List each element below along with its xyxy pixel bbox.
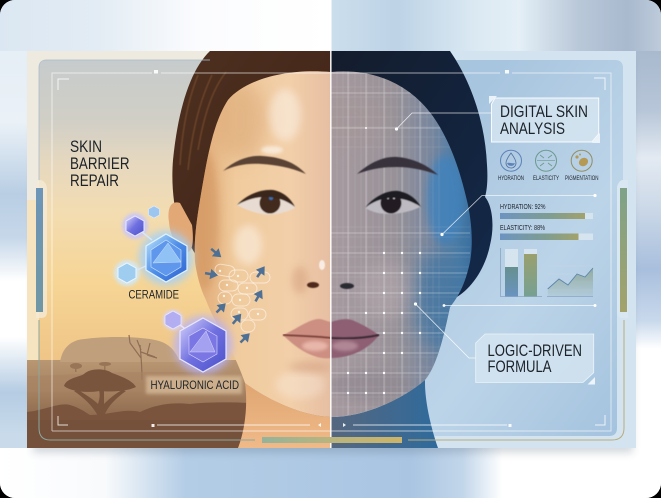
heading: skin barrier repair: SKIN xyxy=(70,138,102,156)
callout: logic-driven formula: LOGIC-DRIVEN xyxy=(488,342,582,360)
neck left xyxy=(238,383,331,448)
hair right xyxy=(331,51,492,300)
line chart xyxy=(547,266,593,296)
right half: blue digital backdrop xyxy=(331,51,636,448)
icon: elasticity xyxy=(536,150,556,171)
portrait: warm left side of the face xyxy=(168,51,332,448)
label: hyaluronic acid xyxy=(146,376,242,394)
heading: skin barrier repair xyxy=(70,138,130,190)
metric: hydration 92% xyxy=(500,202,593,219)
nostril left xyxy=(307,282,319,288)
callout: logic-driven formula: FORMULA xyxy=(488,358,552,376)
icon labels: PIGMENTATION xyxy=(565,175,598,182)
HUD frame lines xyxy=(39,60,624,440)
heading: skin barrier repair: BARRIER xyxy=(70,155,130,173)
bar chart xyxy=(500,248,542,296)
eyebrow left xyxy=(223,156,306,174)
icon: pigmentation xyxy=(571,150,592,171)
skin cell network xyxy=(214,263,270,332)
metric: hydration 92%: HYDRATION: 92% xyxy=(500,202,546,211)
callout: digital skin analysis: DIGITAL SKIN xyxy=(500,103,588,121)
eye left xyxy=(237,190,295,215)
grid nodes xyxy=(347,127,421,394)
bare tree xyxy=(129,335,157,380)
icon labels xyxy=(498,175,598,182)
label: ceramide: CERAMIDE xyxy=(128,288,179,302)
icon labels: ELASTICITY xyxy=(533,175,559,182)
connector: upper metrics divider xyxy=(440,194,597,236)
connector: lower metrics divider xyxy=(443,304,596,307)
icon labels: HYDRATION xyxy=(498,175,524,182)
callout: digital skin analysis: ANALYSIS xyxy=(500,120,565,138)
bottom accent bar xyxy=(262,437,402,443)
right side accent bar xyxy=(617,180,628,318)
absorption arrows xyxy=(204,246,267,345)
face scan grid xyxy=(331,60,470,420)
nostril right xyxy=(340,283,354,289)
ear left xyxy=(168,202,193,252)
distant mountain xyxy=(60,337,180,362)
hair left xyxy=(172,51,331,262)
hyaluronic acid molecule xyxy=(163,310,232,374)
left half: savanna sunset backdrop xyxy=(27,51,331,448)
neck right xyxy=(331,380,438,448)
lips right xyxy=(331,319,379,358)
icon: hydration xyxy=(500,150,522,171)
foreground hills xyxy=(27,402,246,420)
portrait: blue right side of the face xyxy=(315,51,492,448)
callout: digital skin analysis xyxy=(395,96,600,143)
heading: skin barrier repair: REPAIR xyxy=(70,172,119,190)
eyebrow right xyxy=(357,157,438,175)
metric: elasticity 88%: ELASTICITY: 88% xyxy=(500,223,545,232)
callout: logic-driven formula xyxy=(414,302,595,384)
acacia tree xyxy=(64,369,136,416)
face right xyxy=(331,71,472,417)
metric: elasticity 88% xyxy=(500,223,593,240)
central split line xyxy=(330,0,332,448)
left side accent bar xyxy=(36,180,47,318)
eye right xyxy=(365,191,421,214)
face left xyxy=(195,71,331,417)
ceramide molecule xyxy=(114,206,193,286)
label: hyaluronic acid: HYALURONIC ACID xyxy=(150,378,239,392)
lips left xyxy=(283,319,331,358)
HUD frame markers xyxy=(152,70,512,427)
small trees and plain xyxy=(70,362,111,372)
